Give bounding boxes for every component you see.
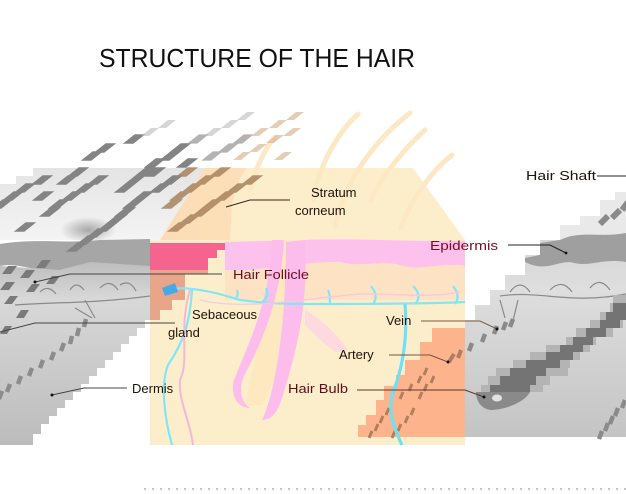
panel: left grey epidermis	[0, 239, 150, 271]
title: STRUCTURE OF THE HAIR	[99, 45, 415, 73]
hair follicle	[233, 240, 348, 420]
panel: pink epidermis	[225, 239, 465, 270]
label: hair shaft: Hair Shaft	[526, 168, 596, 183]
panel: right grey dermis	[465, 192, 626, 437]
hair bulb sheath	[481, 295, 626, 392]
colour hair tiles: over peach	[163, 168, 261, 231]
follicle cluster: left	[0, 260, 60, 334]
label: stratum corneum	[226, 185, 357, 218]
label: dermis	[50, 381, 174, 396]
panel: right grey epidermis	[525, 233, 626, 275]
panel: left grey skin surface	[0, 168, 205, 243]
grey hair tiles: left surface	[0, 135, 196, 251]
artery	[180, 290, 193, 445]
label: artery	[339, 347, 450, 364]
label: hair follicle	[34, 267, 309, 284]
label: epidermis: Epidermis	[430, 238, 499, 253]
label: dermis: Dermis	[132, 381, 174, 396]
hair bulb: right stepped hair	[476, 295, 626, 410]
label: sebaceous gland: gland	[168, 325, 200, 340]
hair tiles: right	[469, 202, 626, 439]
label: stratum corneum: Stratum	[311, 185, 357, 200]
nerve and vessel network: grey right	[500, 282, 626, 325]
panel: left grey dermis	[0, 262, 150, 445]
hair root tiles: left dermis	[0, 319, 86, 399]
panel: reddish block	[150, 270, 208, 320]
panel: peach papillary layer	[225, 262, 465, 300]
dotted bottom rule	[144, 488, 626, 490]
label: hair shaft	[526, 168, 626, 183]
label: artery: Artery	[339, 347, 374, 362]
label: stratum corneum: corneum	[295, 203, 346, 218]
label: hair bulb: Hair Bulb	[288, 381, 348, 396]
nerve and vessel network: grey left	[15, 283, 150, 318]
blood vessel: vein and artery	[162, 283, 465, 445]
hair shafts above skin (colour)	[250, 113, 452, 228]
hair shaft in follicle	[245, 240, 305, 405]
label: sebaceous gland: Sebaceous	[192, 307, 258, 322]
label: hair bulb	[288, 381, 486, 398]
vessels pink	[200, 292, 460, 304]
label: sebaceous gland	[0, 307, 258, 340]
label: hair follicle: Hair Follicle	[233, 267, 309, 282]
hair root tiles: centre	[369, 350, 461, 438]
panel: right grey surface	[560, 192, 626, 240]
label: vein	[386, 313, 498, 330]
label: vein: Vein	[386, 313, 411, 328]
panel: central colour cross-section	[150, 168, 465, 445]
panel: red-pink epidermis block	[150, 243, 225, 270]
faint hair tiles: above skin	[189, 135, 252, 160]
hair bulb core	[490, 303, 626, 392]
label: epidermis	[430, 238, 567, 254]
panel: orange subcutaneous triangle	[350, 328, 465, 437]
